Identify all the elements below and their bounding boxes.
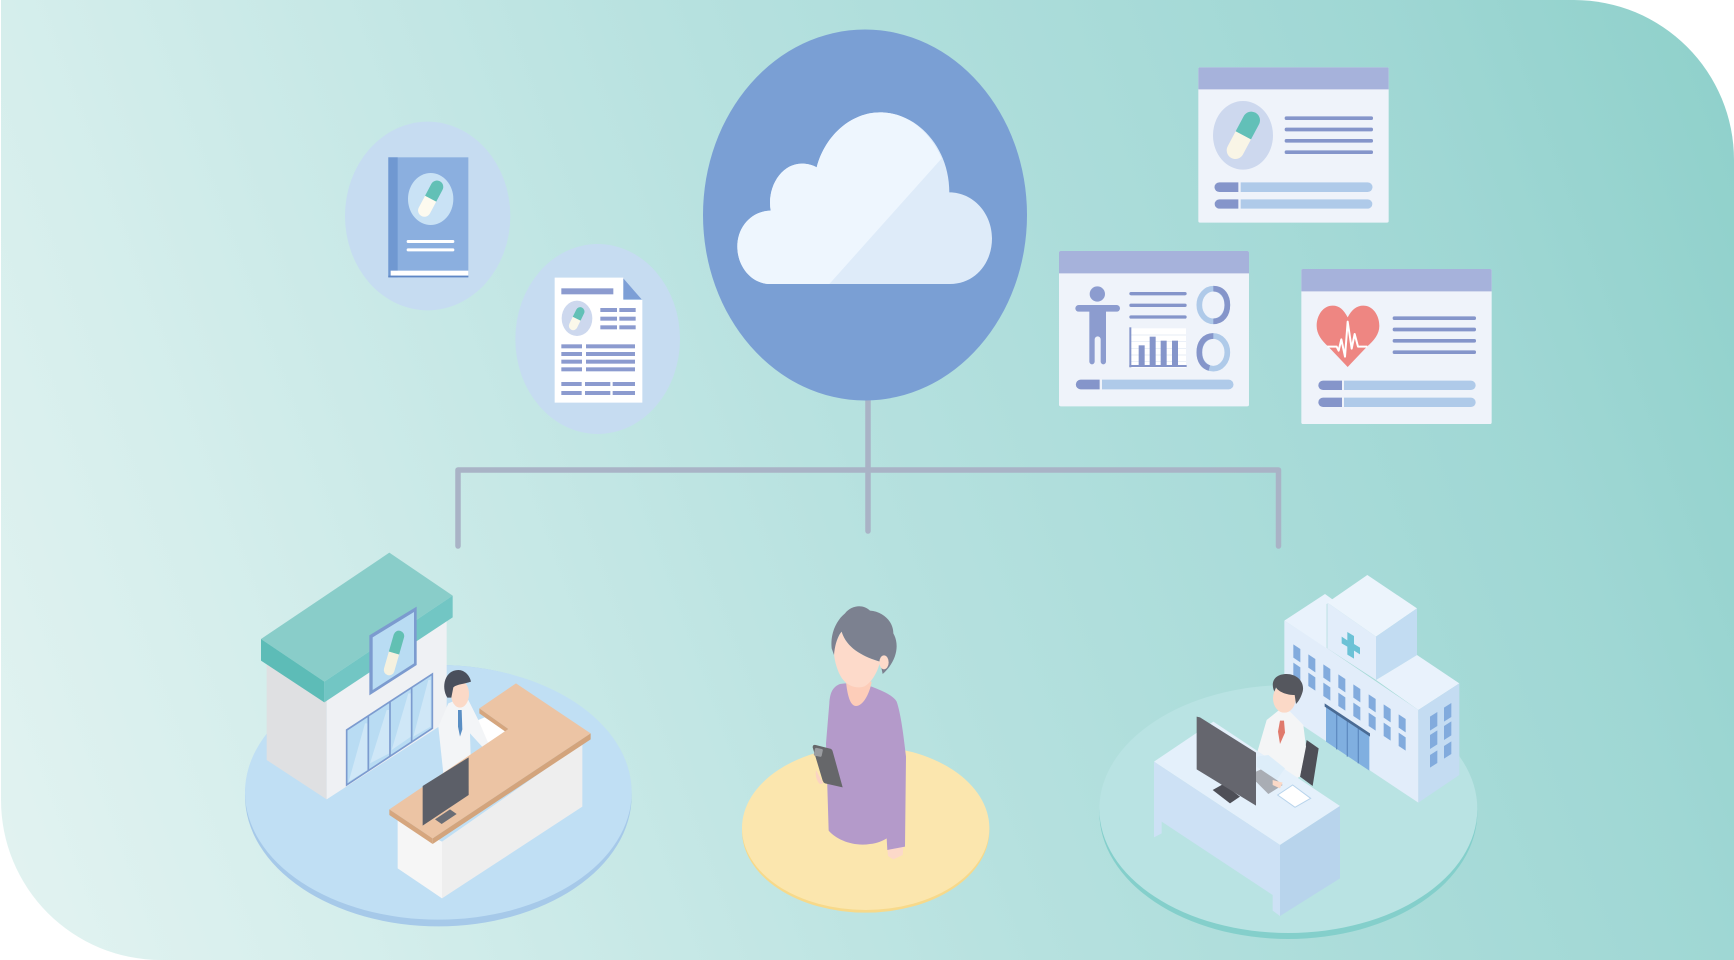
panel: record cards xyxy=(1059,67,1492,424)
bubble: book xyxy=(345,122,510,310)
bubble: document xyxy=(515,244,680,434)
hospital building xyxy=(1284,575,1459,803)
icon: human figure xyxy=(1075,286,1120,364)
icon: cloud xyxy=(737,112,992,284)
pharmacist xyxy=(438,670,505,773)
card: body metrics xyxy=(1059,251,1249,406)
sign with pill xyxy=(369,607,417,695)
phone xyxy=(813,745,843,787)
windows xyxy=(1293,644,1451,768)
panel: pharmacy xyxy=(245,553,632,926)
doctor xyxy=(1255,674,1319,787)
disc xyxy=(742,746,989,913)
disc xyxy=(1099,685,1477,939)
panel: drug book and document bubbles xyxy=(345,122,680,434)
reception desk xyxy=(389,683,591,898)
donut charts xyxy=(1199,289,1227,369)
pharmacy building xyxy=(261,553,453,799)
computer monitor xyxy=(1197,717,1256,806)
panel: hospital and doctor xyxy=(1099,575,1477,939)
desk xyxy=(1154,722,1340,916)
entrance xyxy=(1325,703,1370,771)
card: heart record xyxy=(1301,269,1492,424)
card: medication record xyxy=(1198,67,1389,223)
bar chart xyxy=(1129,327,1187,368)
icon: document xyxy=(555,278,642,403)
icon: cross xyxy=(1342,632,1360,659)
cloud circle xyxy=(703,30,1027,400)
monitor xyxy=(423,757,469,826)
disc xyxy=(245,665,632,926)
panel: patient xyxy=(742,606,989,913)
window xyxy=(347,674,432,785)
icon: heart with pulse xyxy=(1317,306,1379,367)
connector lines xyxy=(458,400,1278,546)
icon: medicine book xyxy=(388,157,468,277)
elderly person xyxy=(813,606,906,859)
keyboard and book xyxy=(1256,768,1283,794)
